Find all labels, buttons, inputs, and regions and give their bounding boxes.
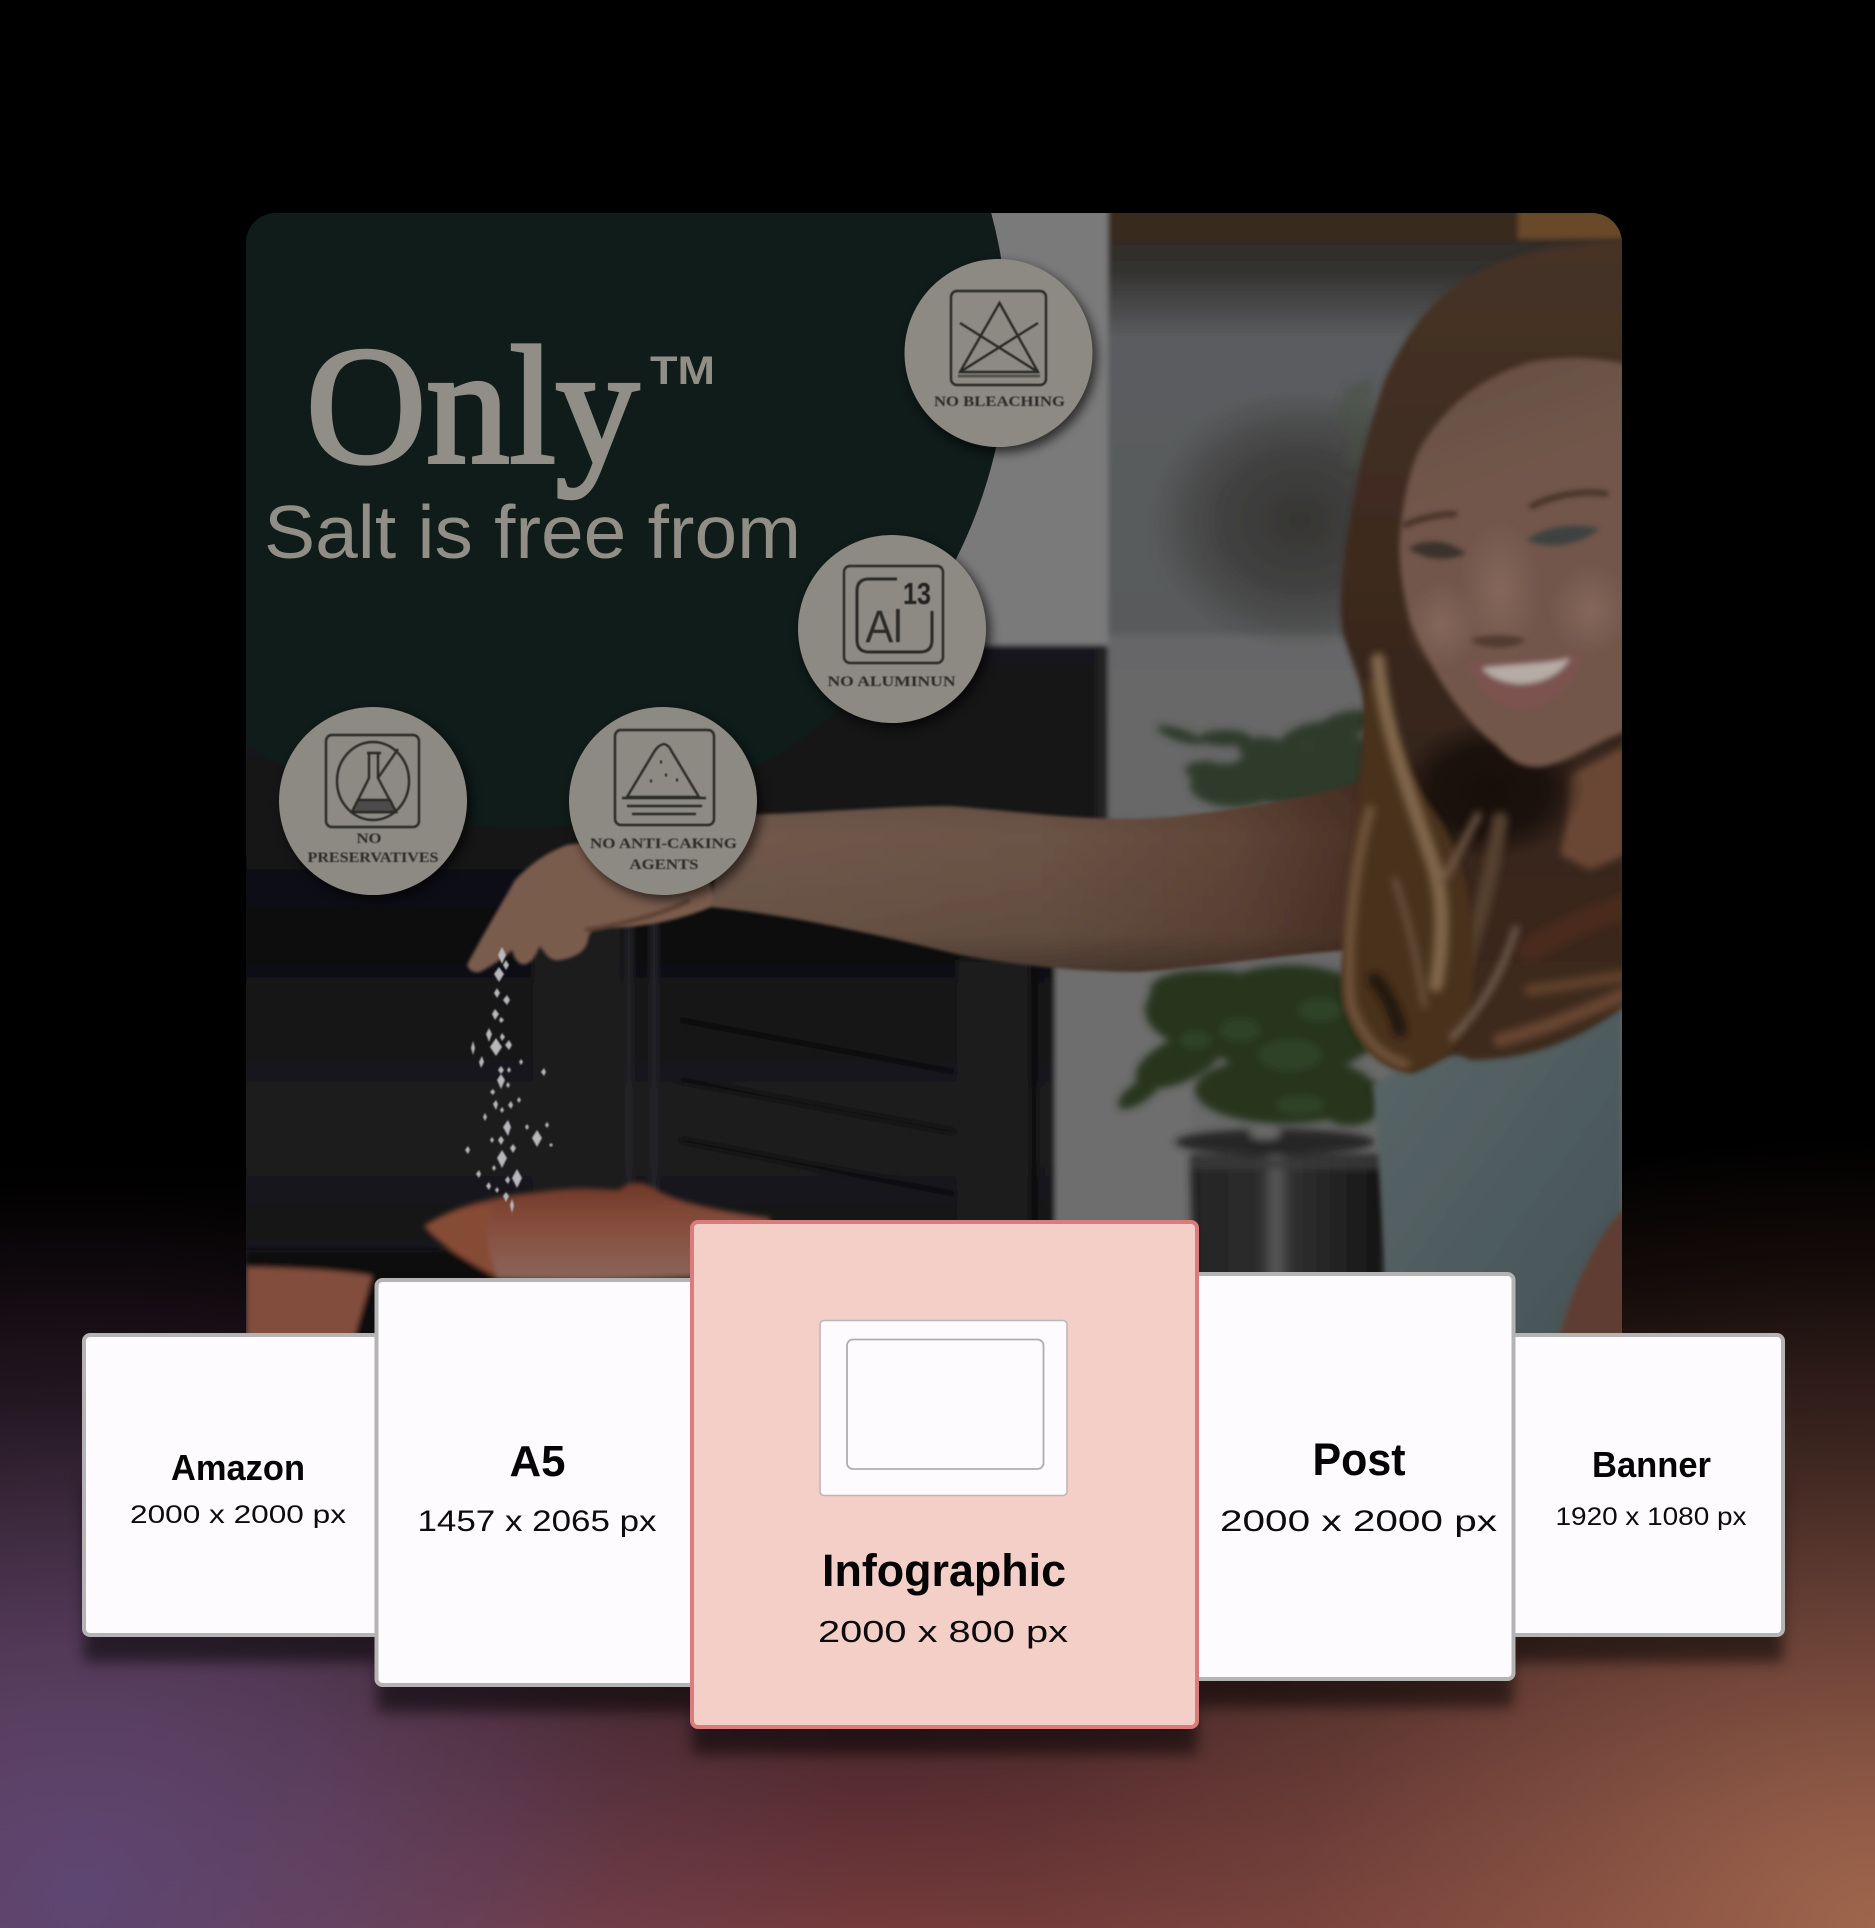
- badge: no preservatives: PRESERVATIVES: [308, 850, 438, 866]
- card: Amazon: Amazon: [171, 1447, 305, 1488]
- green brand circle: [248, 213, 1002, 560]
- panel: product photo: [246, 213, 1622, 1333]
- icon: aluminum element: 13: [903, 576, 931, 611]
- face: [1399, 358, 1626, 767]
- badge: no aluminum: NO ALUMINUN: [828, 674, 956, 690]
- card: A5: A5: [510, 1437, 566, 1486]
- card: Amazon: [84, 1335, 424, 1635]
- badge: no anti-caking agents: AGENTS: [630, 857, 698, 873]
- hair strands front: [1349, 660, 1516, 1064]
- t-shirt: [1373, 1005, 1622, 1350]
- badge: no preservatives: NO: [356, 831, 382, 847]
- card: Banner: Banner: [1592, 1444, 1711, 1485]
- card drop shadows: [84, 1480, 1783, 1754]
- badge: no anti-caking agents: NO ANTI-CAKING: [590, 836, 737, 852]
- card: A5: 1457 x 2065 px: [418, 1505, 656, 1538]
- icon: aluminum element: Al: [866, 601, 902, 652]
- card: Post: Post: [1312, 1434, 1406, 1485]
- hair mass: [1341, 240, 1626, 1072]
- card: A5: [376, 1280, 736, 1685]
- arm and hand: [467, 778, 1372, 972]
- dark hair under chin: [1414, 730, 1580, 852]
- card: Infographic (selected): [692, 1222, 1197, 1727]
- face features: [1403, 493, 1630, 710]
- icon: salt pile on dish: [615, 730, 714, 825]
- card: Infographic (selected): Infographic: [822, 1545, 1066, 1596]
- icon: crossed triangle: [951, 291, 1046, 385]
- card: Post: 2000 x 2000 px: [1220, 1505, 1497, 1538]
- badge: no bleaching: NO BLEACHING: [934, 394, 1065, 410]
- card: Infographic (selected): 2000 x 800 px: [818, 1614, 1069, 1649]
- plants and pot: [1113, 378, 1385, 1350]
- kitchen background scene: [240, 205, 1633, 1355]
- hair front over arm: [1342, 680, 1474, 1072]
- card: Banner: [1470, 1335, 1783, 1635]
- icon: aluminum element: [844, 566, 943, 663]
- heading: Only TM: Only: [306, 313, 639, 499]
- right side hair bands: [1466, 820, 1630, 1040]
- heading: Only TM: TM: [650, 349, 715, 393]
- subheading: Salt is free from: Salt is free from: [264, 490, 801, 574]
- salmon fillets: [246, 1183, 770, 1345]
- icon: frame preview: [820, 1320, 1067, 1496]
- neck: [1560, 745, 1626, 870]
- card: Amazon: 2000 x 2000 px: [130, 1501, 347, 1529]
- card: Banner: 1920 x 1080 px: [1556, 1503, 1747, 1531]
- woman: [1341, 240, 1630, 1350]
- salt falling: [465, 947, 553, 1213]
- icon: crossed flask: [326, 735, 419, 827]
- badge: no aluminum: [798, 535, 991, 729]
- badge: no bleaching: [904, 259, 1097, 453]
- card: Post: [1150, 1274, 1514, 1679]
- badge: no anti-caking agents: [569, 707, 762, 901]
- badge: no preservatives: [279, 707, 472, 901]
